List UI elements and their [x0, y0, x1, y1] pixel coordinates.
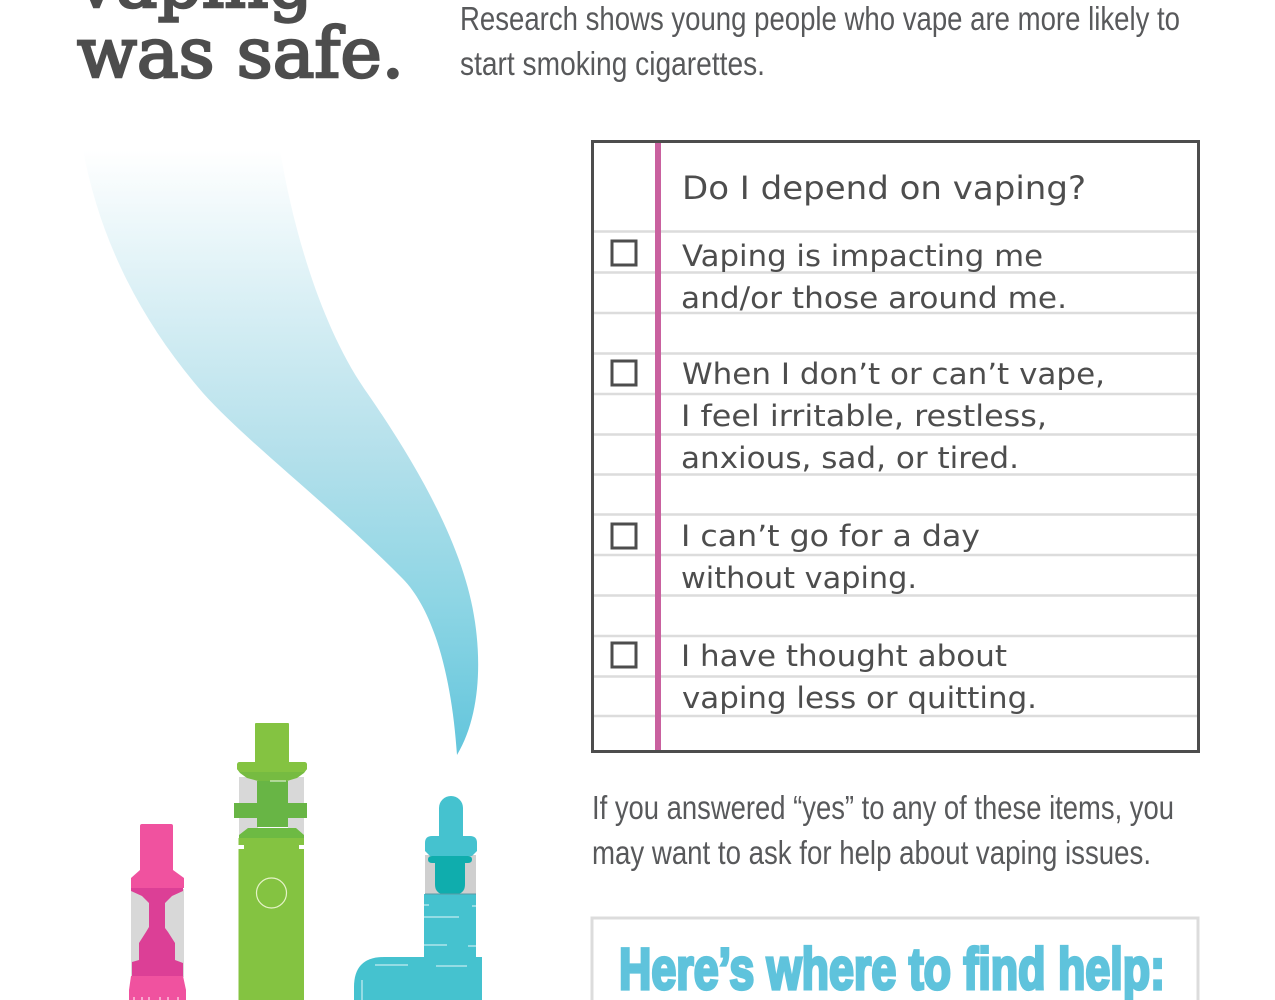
- checkbox 1: [612, 241, 636, 265]
- intro text: [460, 0, 1180, 82]
- intro text: start smoking cigarettes.: [460, 45, 765, 82]
- checklist item 4: I have thought about: [681, 639, 1007, 673]
- checkbox 4: [612, 643, 636, 667]
- smoke plume: [83, 150, 478, 755]
- advice text: [592, 789, 1174, 871]
- icon: teal vape mod: [354, 796, 482, 1000]
- checklist item 1: Vaping is impacting me: [682, 239, 1043, 273]
- checklist item 1: and/or those around me.: [681, 281, 1067, 315]
- advice text: may want to ask for help about vaping issues.: [592, 834, 1151, 871]
- checklist item 2: When I don’t or can’t vape,: [682, 357, 1105, 391]
- checklist item 3: I can’t go for a day: [681, 519, 980, 553]
- checklist item 4: vaping less or quitting.: [682, 681, 1037, 715]
- icon: pink vape pen: [129, 824, 186, 1000]
- panel: checklist: [592, 142, 1198, 752]
- checklist item 1: [681, 239, 1067, 315]
- checklist heading: Do I depend on vaping?: [682, 169, 1086, 207]
- checklist item 2: anxious, sad, or tired.: [681, 441, 1019, 475]
- checkbox 2: [612, 361, 636, 385]
- checklist item 2: [681, 357, 1105, 475]
- checklist item 3: [681, 519, 980, 595]
- icon: power button: [256, 878, 286, 908]
- advice text: If you answered “yes” to any of these items, you: [592, 789, 1174, 826]
- panel: help box: [592, 918, 1198, 1000]
- checkbox 3: [612, 524, 636, 548]
- checklist item 2: I feel irritable, restless,: [681, 399, 1047, 433]
- icon: green vape pen: [234, 723, 307, 1000]
- checklist item 4: [681, 639, 1037, 715]
- checklist item 3: without vaping.: [681, 561, 917, 595]
- title: was safe.: [77, 14, 404, 94]
